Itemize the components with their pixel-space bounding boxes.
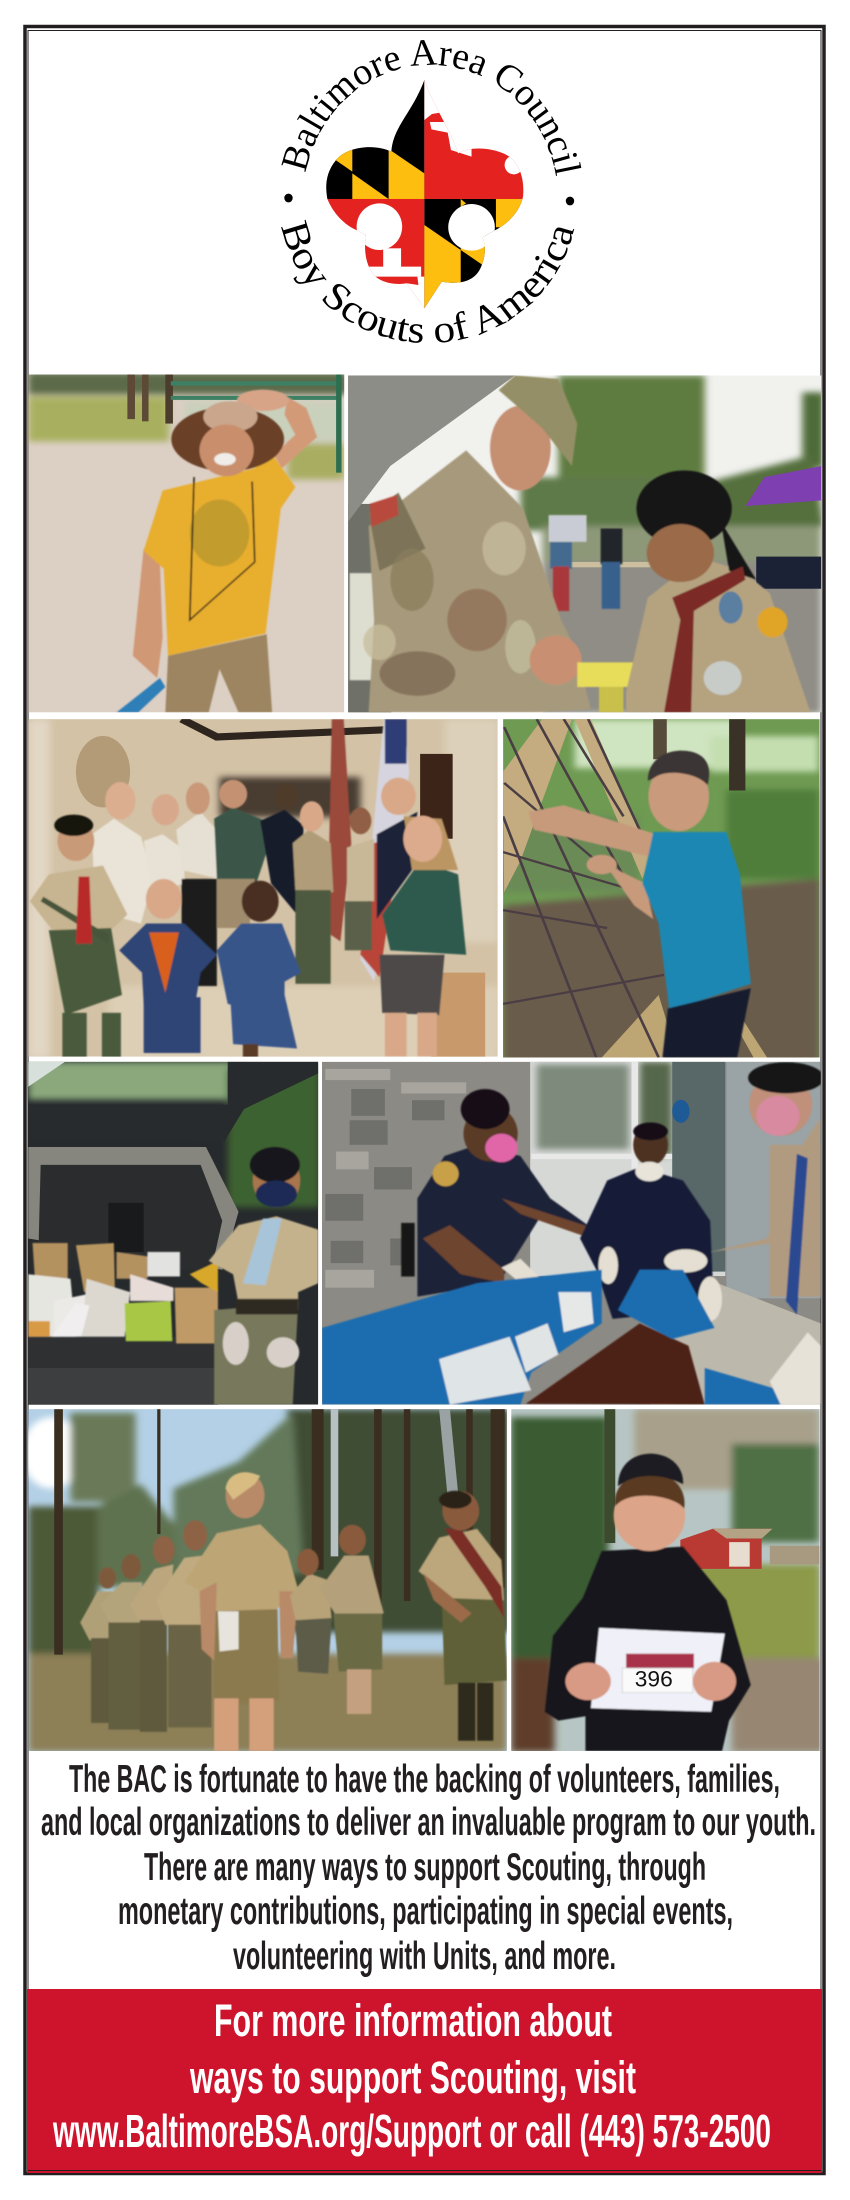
text: Baltimore Area Council: Baltimore Area Council — [281, 40, 582, 176]
photo: scouts standing in pine forest — [22, 1409, 510, 1752]
photo rows three and four — [22, 1062, 824, 1752]
icon: Maryland flag fleur-de-lis — [320, 77, 527, 313]
photo: group of scouts with flags — [28, 719, 499, 1062]
icon: right dot — [566, 197, 574, 205]
icon: left dot — [284, 194, 293, 202]
panel: red call to action — [27, 1989, 822, 2173]
photo: police officers packing food bags — [322, 1062, 824, 1405]
logo: Baltimore Area Council emblem — [281, 40, 582, 343]
photo: soldier and scout girl at event — [348, 375, 824, 714]
photo rows one and two — [28, 372, 824, 1062]
text: Boy Scouts of America: Boy Scouts of America — [281, 220, 574, 343]
photo: boy in yellow shirt saluting — [28, 372, 348, 712]
text: call to action: For more information about — [214, 1995, 612, 2046]
text: call to action — [52, 1995, 771, 2157]
photo: boy holding race number 396 — [511, 1409, 824, 1752]
photo: boy climbing rope net — [503, 719, 820, 1062]
text: race bib number: 396 — [635, 1667, 673, 1692]
photo: scout with food donations at car — [28, 1062, 320, 1406]
text: call to action: ways to support Scouting, visit — [189, 2052, 636, 2103]
text block: support message — [41, 1758, 816, 1978]
